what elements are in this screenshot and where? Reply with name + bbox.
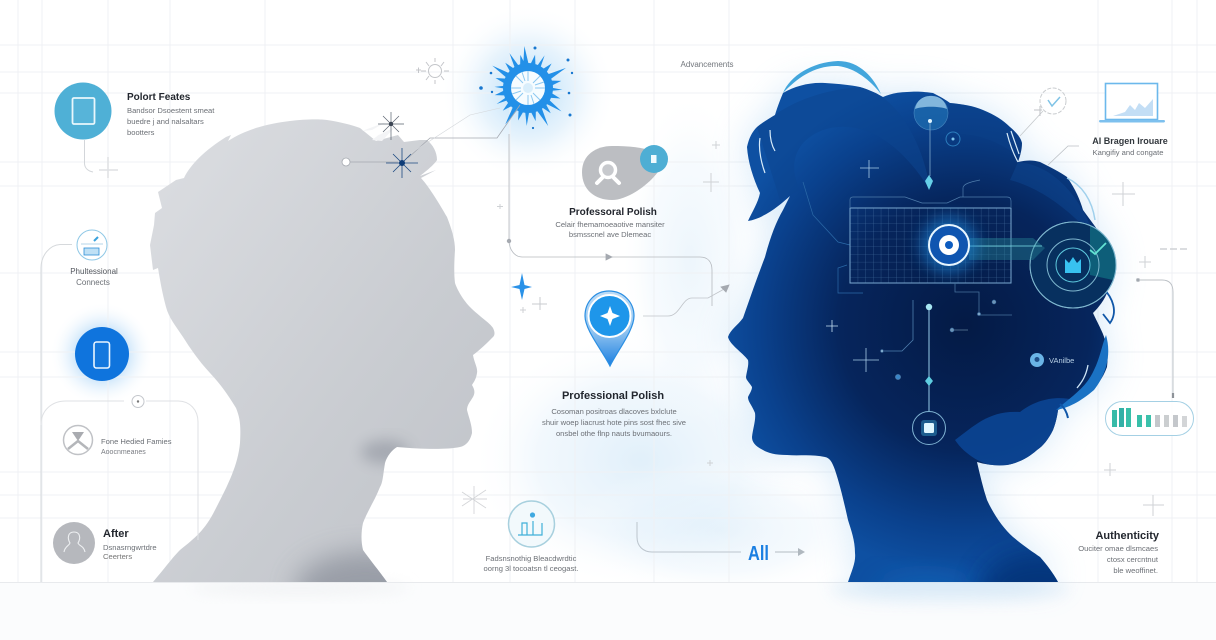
card: authenticity xyxy=(1078,530,1160,575)
card: polort features: bootters xyxy=(127,128,155,137)
arrow: all label xyxy=(637,522,805,565)
panel: left feature frame xyxy=(41,244,198,582)
neck glow xyxy=(898,577,952,582)
card: authenticity: ble weoffinet. xyxy=(1113,566,1158,575)
icon: check gear xyxy=(1020,88,1066,136)
small sun outline icon xyxy=(416,58,449,84)
hair bun xyxy=(955,398,1075,467)
panel: left feature frame: Dsnasrngwrtdre xyxy=(103,543,157,552)
card: bottom chart: Fadsnsnothig Bleacdwrdtic xyxy=(486,554,577,563)
icon: tablet xyxy=(54,82,112,140)
icon: laptop chart xyxy=(1099,84,1165,122)
grid display xyxy=(850,208,1011,283)
card: ai brand insights: AI Bragen Irouare xyxy=(1092,136,1168,146)
grey head silhouette xyxy=(150,119,494,628)
card: professional polish main: onsbel othe flnp nauts bvumaours. xyxy=(556,429,672,438)
connector right of head xyxy=(1136,278,1173,398)
vertical node line icon xyxy=(912,304,946,444)
card: polort features: Polort Feates xyxy=(127,92,191,103)
outer strand xyxy=(1067,178,1095,220)
circuit panel in blue head xyxy=(803,180,1045,293)
head halo xyxy=(728,83,1110,582)
starburst icon xyxy=(479,46,573,129)
star sparkles on grey head xyxy=(362,112,418,178)
card: professional polish main: shuir woep liacrust hote pins sost fhec sive xyxy=(542,418,686,427)
card: professional polish top: Professoral Polish xyxy=(569,207,657,218)
sparkle decorations xyxy=(497,141,1187,516)
panel: left feature frame: Aoocnmeanes xyxy=(101,449,146,456)
hair lobes xyxy=(757,87,930,200)
icon: bar diagram xyxy=(508,501,554,547)
card: polort features: Bandsor Dsoestent smeat xyxy=(127,106,215,115)
card: polort features xyxy=(54,82,215,178)
card: polort features: buedre j and nalsaltars xyxy=(127,117,204,126)
panel: left feature frame: Ceerters xyxy=(103,552,132,561)
icon: avatar xyxy=(53,522,95,564)
panel: left feature frame: After xyxy=(103,528,129,540)
blue head silhouette xyxy=(728,61,1114,630)
card: authenticity: ctosx cercntnut xyxy=(1107,555,1159,564)
card: professional polish main xyxy=(542,390,686,438)
icon: grey emblem xyxy=(64,426,92,454)
top label: Advancements xyxy=(681,60,733,69)
badge: vwlbe: VAnilbe xyxy=(1049,356,1074,365)
white hair strands xyxy=(759,130,1019,173)
card: bottom chart xyxy=(484,501,578,573)
burst outline bottom xyxy=(462,486,487,514)
card: professional connects: Phultessional xyxy=(70,267,118,276)
icon: location pin xyxy=(585,291,634,366)
neck shadow xyxy=(287,436,410,582)
card: professional polish top: Celair fhemamoeaotive mansiter xyxy=(555,220,665,229)
card: professional polish main: Professional Polish xyxy=(562,390,664,402)
card: ai brand insights xyxy=(1048,84,1168,165)
card: authenticity: Ouciter omae dlsmcaes xyxy=(1078,544,1158,553)
panel: left feature frame: Fone Hedied Famies xyxy=(101,437,172,446)
focus ring icon xyxy=(920,216,978,274)
radar rings icon xyxy=(1030,222,1116,308)
card: professional polish main: Cosoman positroas dlacoves bxlclute xyxy=(551,407,677,416)
card: professional connects: Connects xyxy=(76,278,110,287)
card: professional polish top xyxy=(555,145,668,239)
arrow: all label: All xyxy=(748,543,769,565)
sparkle group: blue star xyxy=(511,273,547,313)
card: ai brand insights: Kangifiy and congate xyxy=(1093,148,1163,157)
card: professional connects xyxy=(70,230,118,287)
connector lines from head to burst xyxy=(342,105,729,316)
icon: badge xyxy=(77,230,107,260)
card: authenticity: Authenticity xyxy=(1095,530,1160,542)
bottom fade band xyxy=(0,578,1216,640)
head circuit traces xyxy=(826,160,1012,380)
top head node icon xyxy=(914,96,960,190)
arrow beam xyxy=(969,238,1045,260)
badge: vwlbe xyxy=(1030,353,1074,367)
bright hair strand right xyxy=(1056,335,1108,410)
card: professional polish top: bsmsscnel ave Dlemeac xyxy=(569,230,651,239)
hair arc xyxy=(783,61,881,94)
icon: phone button xyxy=(75,327,129,381)
card: bottom chart: oorng 3l tocoatsn tl ceogast. xyxy=(484,564,578,573)
bar gauge xyxy=(1106,402,1194,436)
background glow washes xyxy=(50,4,870,600)
icon: grey blob with teal badge xyxy=(582,145,668,200)
